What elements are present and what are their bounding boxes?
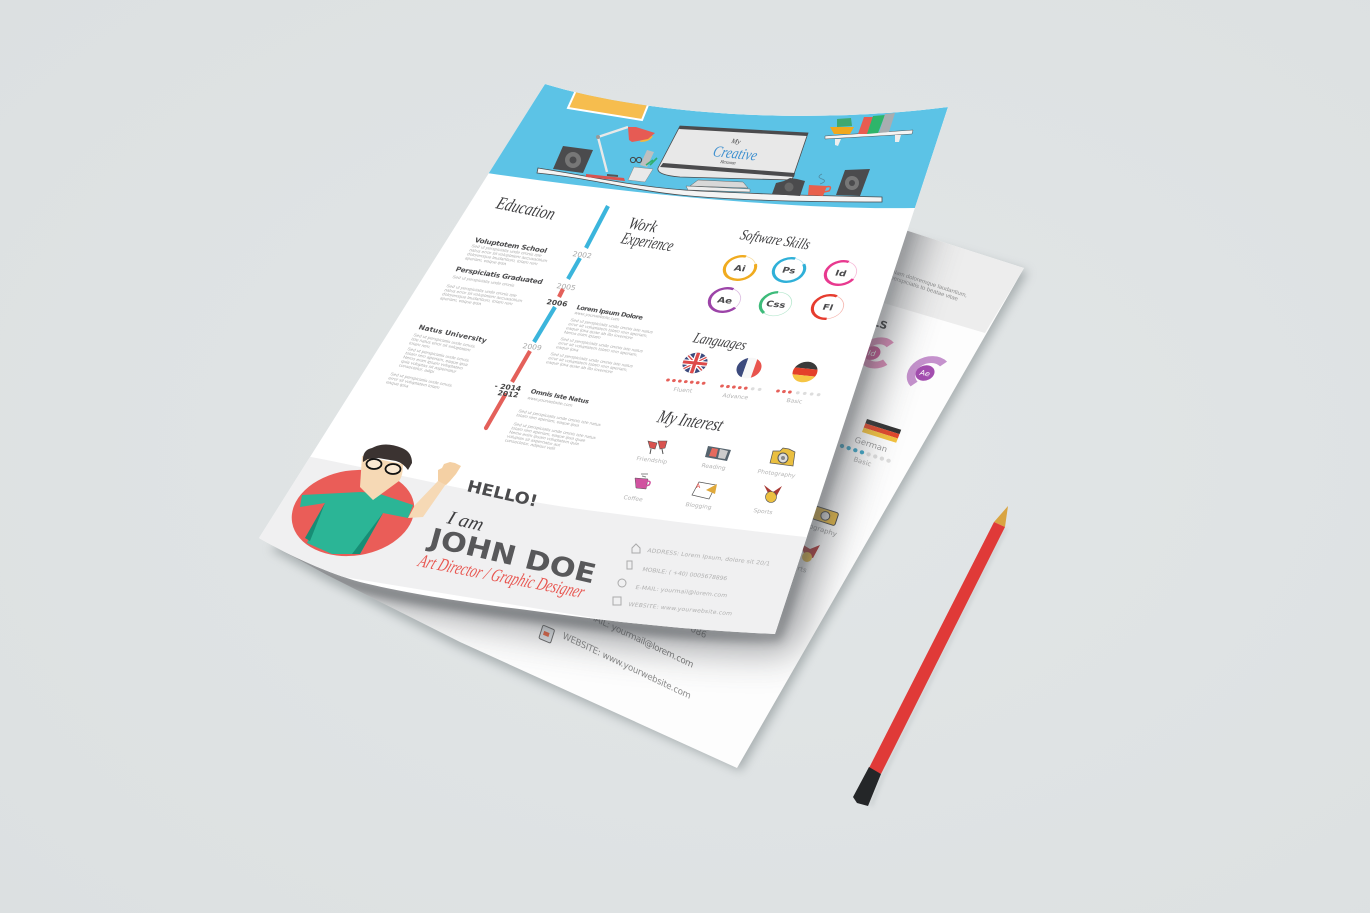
red book on desk: [586, 174, 625, 181]
pencil: [853, 506, 1008, 806]
skill ring: Ai: Ai: [732, 264, 747, 274]
desk lamp: [596, 127, 655, 176]
education: Perspiciatis Graduated: natus error sit voluptatem accusantium: [443, 288, 524, 303]
work: Omnis Iste Natus: Sed ut perspiciatis unde omnis iste natus: [518, 409, 603, 427]
flag: France: [736, 358, 762, 378]
language label: Advance: Advance: [721, 393, 749, 401]
right speaker: [836, 169, 870, 196]
work: Lorem Ipsum Dolore: www.yourwebsite.com: [574, 311, 621, 322]
interest icon: Sports medal: [764, 485, 782, 502]
greeting: HELLO: HELLO!: [465, 477, 540, 511]
work: Lorem Ipsum Dolore: Nemo enim ipsam: [563, 330, 602, 340]
icon: website: [613, 597, 621, 605]
skill ring: Id: [815, 255, 867, 291]
education: Natus University: iste natus error sit voluptatem: [410, 337, 472, 352]
education: Natus University: Sed ut perspiciatis unde omnis: [413, 333, 477, 349]
contact row: website: WEBSITE: www.yourwebsite.com: [627, 602, 733, 617]
back sheet email text: MAIL: yourmail@lorem.com: [587, 611, 695, 671]
work: Lorem Ipsum Dolore: Sed ut perspiciatis unde omnis iste natus: [570, 318, 655, 335]
timeline years: 2005: [555, 282, 577, 292]
shirt: [300, 492, 413, 554]
skill ring: Ae: [698, 282, 752, 318]
character illustration: [277, 444, 461, 563]
back sheet website text: WEBSITE: www.yourwebsite.com: [561, 631, 692, 702]
work: Lorem Ipsum Dolore: [545, 304, 655, 377]
back sheet sports label: rts: [796, 564, 808, 575]
back sheet phone digits: 086: [689, 624, 708, 641]
icon: home: [632, 544, 640, 553]
timeline years: - 2014: [493, 382, 522, 393]
education: Perspiciatis Graduated: Perspiciatis Graduated: [454, 265, 545, 286]
work: Lorem Ipsum Dolore: error sit voluptatem totam rem aperiam,: [547, 356, 629, 372]
work: Omnis Iste Natus: totam rem aperiam, eaque ipsa: [515, 413, 581, 428]
education: Natus University: Natus University: [417, 323, 489, 345]
education: Natus University: totam rem aperiam, eaque ipsa: [404, 351, 469, 367]
interest icon: Photography: [770, 448, 795, 466]
education: Natus University: Nemo enim ipsam voluptatem: [402, 355, 464, 371]
interest icon: Reading: [705, 446, 731, 461]
contact row: email: E-MAIL: yourmail@lorem.com: [634, 585, 728, 599]
heading: Software Skills: Software Skills: [737, 227, 813, 253]
icon: phone: [627, 561, 632, 569]
timeline years: 2012: [496, 389, 520, 399]
work: Omnis Iste Natus: Omnis Iste Natus: [529, 388, 591, 405]
skill ring: Css: Css: [764, 299, 788, 311]
skill ring: Id: Id: [833, 269, 848, 279]
timeline years: 2002: [571, 250, 593, 260]
interest icon: Coffee: [635, 474, 650, 489]
interest icon: Blogging: [692, 482, 717, 499]
education: Natus University: Sed ut perspiciatis unde omnis: [390, 372, 454, 388]
shadow under back sheet: [270, 232, 1028, 771]
back sheet German flag: [862, 419, 901, 443]
heading: Languages: Languages: [690, 330, 749, 354]
education: Voluptotem School: doloremque laudantium, totam rem: [466, 252, 539, 266]
yellow wall picture: [568, 88, 650, 120]
shirt shadow: [305, 503, 383, 554]
timeline: [486, 206, 608, 428]
work: Lorem Ipsum Dolore: Lorem Ipsum Dolore: [575, 304, 645, 322]
contact row: email: [618, 579, 728, 599]
work: Lorem Ipsum Dolore: error sit voluptatem totam rem aperiam,: [557, 341, 639, 357]
skill ring: Fl: [805, 292, 851, 322]
work: Lorem Ipsum Dolore: error sit voluptatem totam rem aperiam,: [567, 322, 649, 338]
language label: Basic: Basic: [785, 398, 803, 405]
education: Perspiciatis Graduated: aperiam, eaque ipsa: [439, 296, 483, 306]
back skill ring: Id: Id: [867, 349, 877, 358]
timeline years: 2009: [521, 342, 543, 352]
contact row: mobile: [627, 561, 728, 582]
education: Natus University: consectetur, adipi: [398, 363, 435, 374]
red coffee cup: [808, 174, 830, 196]
pencil wood tip: [994, 506, 1008, 527]
back sheet label Basic: Basic: [852, 455, 873, 468]
education: Natus University: Sed ut perspiciatis unde omnis: [407, 347, 471, 363]
back sheet medal icon: [800, 543, 820, 562]
education: Voluptotem School: natus error sit voluptatem accusantium: [468, 248, 549, 263]
education: Perspiciatis Graduated: doloremque laudantium, totam rem: [441, 292, 514, 306]
language rating: Fluent: [666, 378, 706, 385]
footer gray band: [260, 457, 807, 634]
contact row: address: ADDRESS: Lorem Ipsum, dolore sit 20/1: [646, 548, 771, 567]
flag: United Kingdom: [682, 352, 708, 374]
greeting: I am: I am: [443, 507, 487, 536]
left speaker: [553, 146, 593, 173]
interest label: Friendship: Friendship: [635, 456, 668, 466]
panel: back resume sheet: [288, 230, 1024, 768]
skill ring: Ps: [762, 252, 816, 288]
interest label: Blogging: Blogging: [684, 502, 713, 511]
timeline years: 2006: [545, 298, 569, 308]
work: Omnis Iste Natus: totam rem aperiam, eaque ipsa quae: [510, 426, 587, 443]
education: Natus University: totam rem.: [408, 341, 432, 349]
hand: [438, 462, 461, 485]
work: Omnis Iste Natus: consectetur, adipisci velit: [504, 438, 557, 451]
education: Voluptotem School: [464, 236, 551, 271]
back skill ring: Id: [859, 339, 893, 366]
work: Lorem Ipsum Dolore: eaque ipsa quae ab illo inventore: [545, 360, 614, 374]
monitor title word Resume: Resume: [718, 160, 737, 167]
education: Natus University: [385, 323, 489, 396]
skill ring: Css: [749, 286, 803, 322]
contact row: mobile: MOBILE: ( +40) 0005678896: [641, 567, 728, 582]
front sheet paper: [259, 84, 948, 634]
panel: front resume sheet: [240, 84, 948, 650]
back sheet rating dots: [839, 443, 891, 463]
blue header band: [487, 84, 948, 208]
work: Omnis Iste Natus: Nemo enim ipsam voluptatem quia: [508, 430, 581, 446]
interest icon: Blogging: A: [696, 484, 701, 490]
pencil black cap: [853, 767, 881, 806]
back sheet header band: [860, 222, 1024, 333]
header illustration: [487, 84, 948, 208]
skill ring: Fl: Fl: [821, 303, 835, 313]
monitor title: My: [729, 137, 743, 146]
education: Voluptotem School: Voluptotem School: [473, 236, 549, 255]
hair: [363, 444, 412, 470]
education: Perspiciatis Graduated: Sed ut perspiciatis unde omnis: [452, 275, 516, 288]
skill ring: Ps: Ps: [780, 266, 798, 276]
education: Voluptotem School: Sed ut perspiciatis unde omnis iste: [471, 244, 543, 258]
pencil shadow: [871, 528, 1006, 806]
heading: Work Experience: Work: [625, 213, 662, 236]
back sheet camera icon: [812, 506, 839, 526]
contact row: website: [613, 597, 733, 617]
camera on desk: [772, 178, 805, 196]
heading: Work Experience: Experience: [618, 228, 677, 255]
work: Omnis Iste Natus: voluptas sit aspernatur aut: [506, 434, 562, 447]
back sheet photography label: tography: [805, 521, 838, 538]
education: Natus University: eaque ipsa: [385, 380, 410, 388]
wall shelf with books and plant: [825, 113, 913, 146]
work: Lorem Ipsum Dolore: eaque ipsa: [555, 345, 580, 352]
name: JOHN DOE: JOHN DOE: [424, 523, 599, 590]
work: Lorem Ipsum Dolore: Sed ut perspiciatis unde omnis iste natus: [560, 337, 645, 354]
education: Natus University: error sit voluptatem totam: [387, 376, 441, 390]
pencil holder: [628, 150, 657, 182]
interest label: Sports: Sports: [752, 508, 773, 516]
heading: Education: Education: [492, 193, 559, 224]
back skill ring: Ae: [907, 357, 945, 387]
interest label: Photography: Photography: [756, 469, 797, 479]
language rating: Advance: [720, 384, 762, 391]
timeline years: [493, 250, 593, 399]
monitor title word Creative: Creative: [711, 144, 759, 164]
heading: Work Experience: [618, 213, 677, 255]
red circle backdrop: [277, 463, 429, 563]
heading: My Interest: My Interest: [653, 406, 727, 436]
interest label: Reading: Reading: [700, 463, 727, 472]
language label: Fluent: Fluent: [672, 387, 693, 395]
interest label: Coffee: Coffee: [622, 495, 644, 503]
work: Omnis Iste Natus: [504, 388, 603, 456]
skill ring: Ae: Ae: [716, 295, 734, 306]
back skill ring: Ae: Ae: [918, 369, 932, 378]
back sheet label German: German: [853, 435, 889, 454]
glasses: [366, 459, 400, 474]
work: Lorem Ipsum Dolore: Sed ut perspiciatis unde omnis iste natus: [550, 352, 635, 369]
education: Natus University: quia voluptas sit aspernatur: [400, 359, 458, 374]
work: Lorem Ipsum Dolore: eaque ipsa quae ab illo inventore: [565, 326, 634, 340]
skill ring: Ai: [714, 250, 766, 286]
icon: email: [618, 579, 626, 587]
education: Perspiciatis Graduated: [439, 265, 545, 311]
desk shelf: [537, 168, 882, 202]
flag: Germany: [792, 362, 818, 382]
raised arm: [408, 481, 446, 518]
back sheet skills heading: LS: [871, 316, 889, 332]
shadow cast by front sheet: [274, 230, 948, 676]
language rating: Basic: [776, 389, 821, 396]
job title: Art Director / Graphic Designer: [414, 551, 588, 603]
work: Omnis Iste Natus: www.yourwebsite.com: [527, 396, 574, 408]
back sheet header text: Nam doloremque laudantium,: [891, 269, 968, 299]
interest icon: Friendship: [648, 441, 667, 454]
work: Omnis Iste Natus: Sed ut perspiciatis unde omnis iste natus: [513, 422, 598, 440]
face and neck: [360, 456, 403, 500]
back sheet website icon: [539, 625, 555, 643]
education: Voluptotem School: aperiam, eaque ipsa: [464, 256, 508, 266]
education: Perspiciatis Graduated: Sed ut perspiciatis unde omnis iste: [446, 284, 518, 298]
pencil red body: [869, 522, 1005, 774]
back sheet header text: perspiciatis to beatae vitae: [889, 275, 959, 303]
monitor: [658, 126, 808, 192]
back sheet paper: [268, 222, 1024, 768]
